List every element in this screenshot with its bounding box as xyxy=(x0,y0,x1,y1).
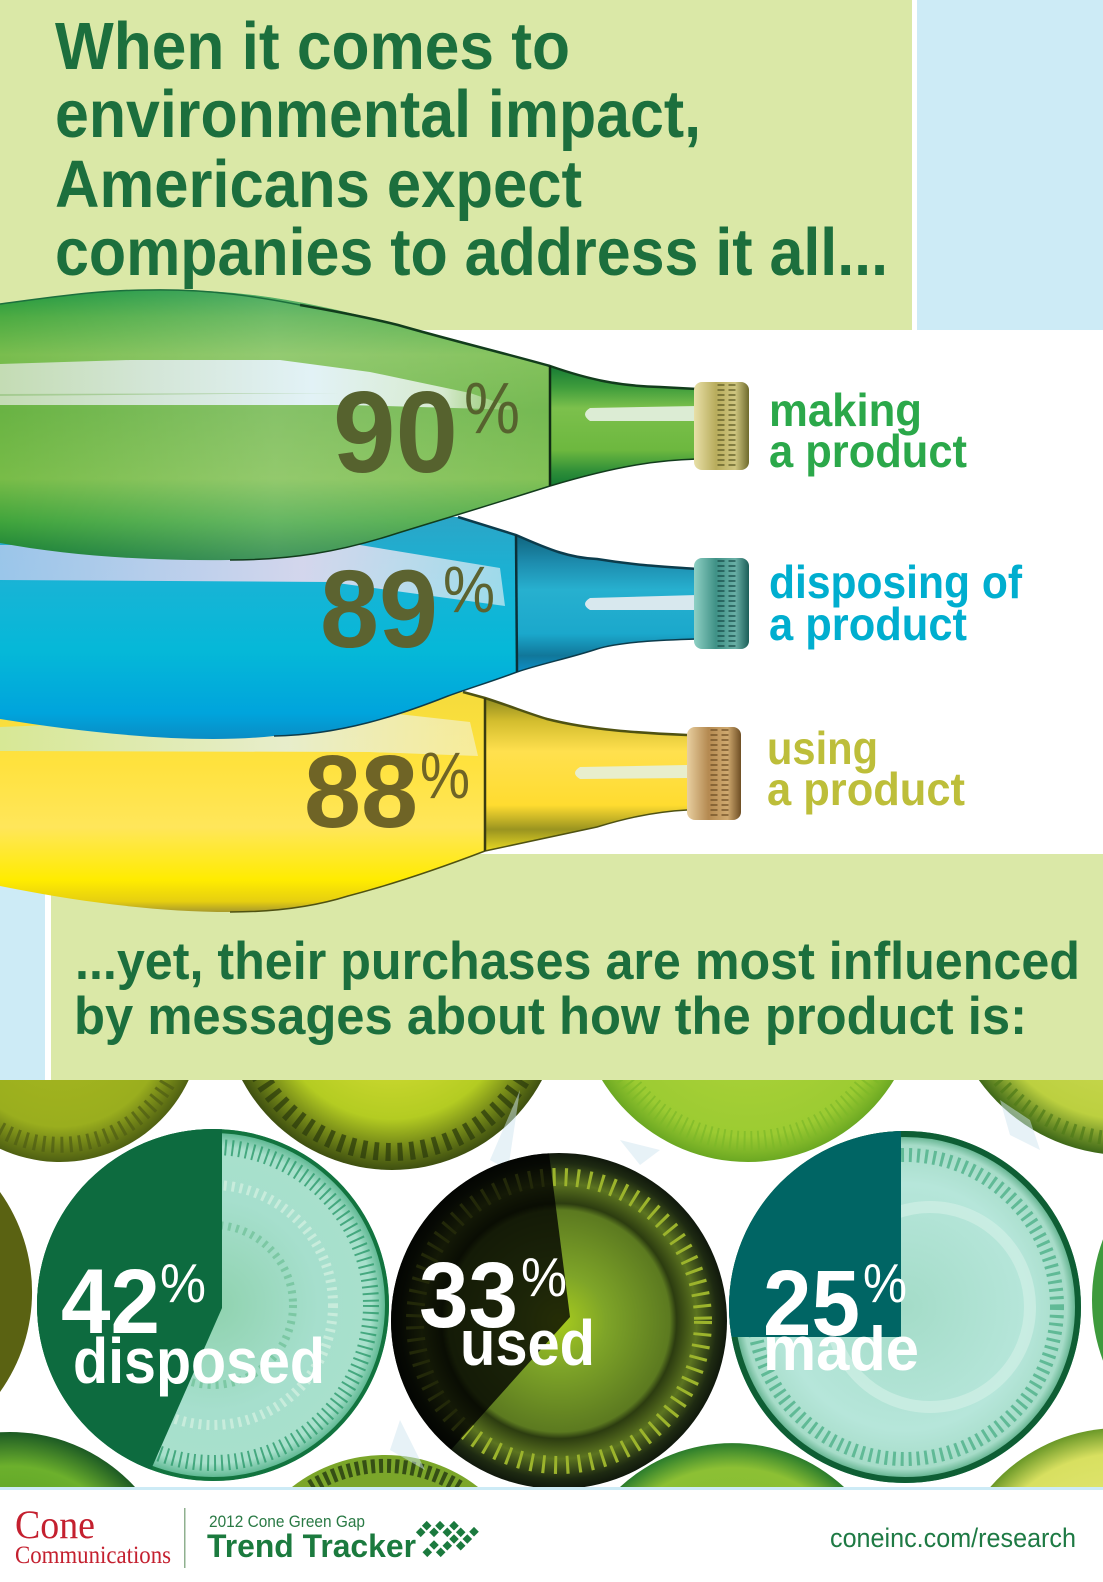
logo: Trend Tracker: Trend Tracker xyxy=(207,1528,416,1564)
stat: 42% disposed: disposed xyxy=(73,1325,325,1397)
stat: 89 percent: 89 xyxy=(320,548,438,671)
blue bottle cap xyxy=(694,558,749,649)
label: making a product xyxy=(769,384,967,477)
stat: 90 percent: % xyxy=(464,369,520,449)
stat: 33% used: % xyxy=(521,1246,567,1308)
stat: 25% made: 25 xyxy=(763,1251,860,1355)
stat: 25% made xyxy=(763,1251,919,1384)
stat: 33% used xyxy=(419,1243,595,1379)
footer divider xyxy=(184,1508,186,1568)
title: When it comes to xyxy=(55,9,570,84)
stat: 89 percent xyxy=(320,548,495,671)
stat: 33% used: used xyxy=(460,1307,595,1379)
stat: 88 percent: % xyxy=(420,738,470,812)
label: disposing of a product: disposing of xyxy=(769,556,1023,608)
blue bottle xyxy=(0,515,697,739)
label: using a product: using xyxy=(767,722,878,774)
yellow bottle xyxy=(0,692,687,912)
label: making a product: making xyxy=(769,384,922,436)
footer rule xyxy=(0,1487,1103,1490)
stat: 33% used: 33 xyxy=(419,1243,518,1347)
label: using a product xyxy=(767,722,965,815)
stat: 90 percent: 90 xyxy=(333,367,458,497)
logo: Cone Communications xyxy=(15,1502,171,1569)
stat: 42% disposed xyxy=(61,1251,325,1397)
pie chart: 25% made xyxy=(720,1120,1081,1483)
logo: Trend Tracker xyxy=(207,1512,479,1564)
stat: 25% made: made xyxy=(763,1315,919,1384)
second heading: by messages about how the product is: xyxy=(74,987,1027,1046)
logo: Trend Tracker: 2012 Cone Green Gap xyxy=(209,1512,365,1531)
logo: Cone Communications: Cone xyxy=(15,1502,95,1547)
label: using a product: a product xyxy=(767,763,965,815)
green bottle xyxy=(0,290,697,560)
panel: top green heading background xyxy=(0,0,912,330)
stat: 42% disposed: 42 xyxy=(61,1251,160,1353)
label: disposing of a product xyxy=(769,556,1023,650)
label: disposing of a product: a product xyxy=(769,598,967,650)
stat: 42% disposed: % xyxy=(160,1252,206,1314)
label: making a product: a product xyxy=(769,425,967,477)
stat: 90 percent xyxy=(333,367,520,497)
panel: top right blue block xyxy=(917,0,1103,330)
pie chart: 33% used xyxy=(391,1153,727,1487)
title: companies to address it all... xyxy=(55,215,888,290)
panel: lower left blue strip xyxy=(0,880,45,1080)
stat: 25% made: % xyxy=(863,1252,907,1314)
stat: 89 percent: % xyxy=(443,552,495,626)
second heading xyxy=(74,932,1080,1046)
green bottle cap xyxy=(694,382,749,470)
website link text: coneinc.com/research xyxy=(830,1523,1076,1553)
title: Americans expect xyxy=(55,147,582,222)
yellow bottle cap xyxy=(687,727,741,820)
icon: diamond grid xyxy=(416,1521,479,1557)
stat: 88 percent xyxy=(304,734,470,849)
logo: Cone Communications: Communications xyxy=(15,1542,171,1569)
pie chart: 42% disposed xyxy=(37,1129,389,1481)
photo: bottle bottoms background xyxy=(0,1080,1103,1487)
panel: second green heading background xyxy=(51,854,1103,1080)
title xyxy=(55,9,888,290)
stat: 88 percent: 88 xyxy=(304,734,418,849)
title: environmental impact, xyxy=(55,77,701,152)
